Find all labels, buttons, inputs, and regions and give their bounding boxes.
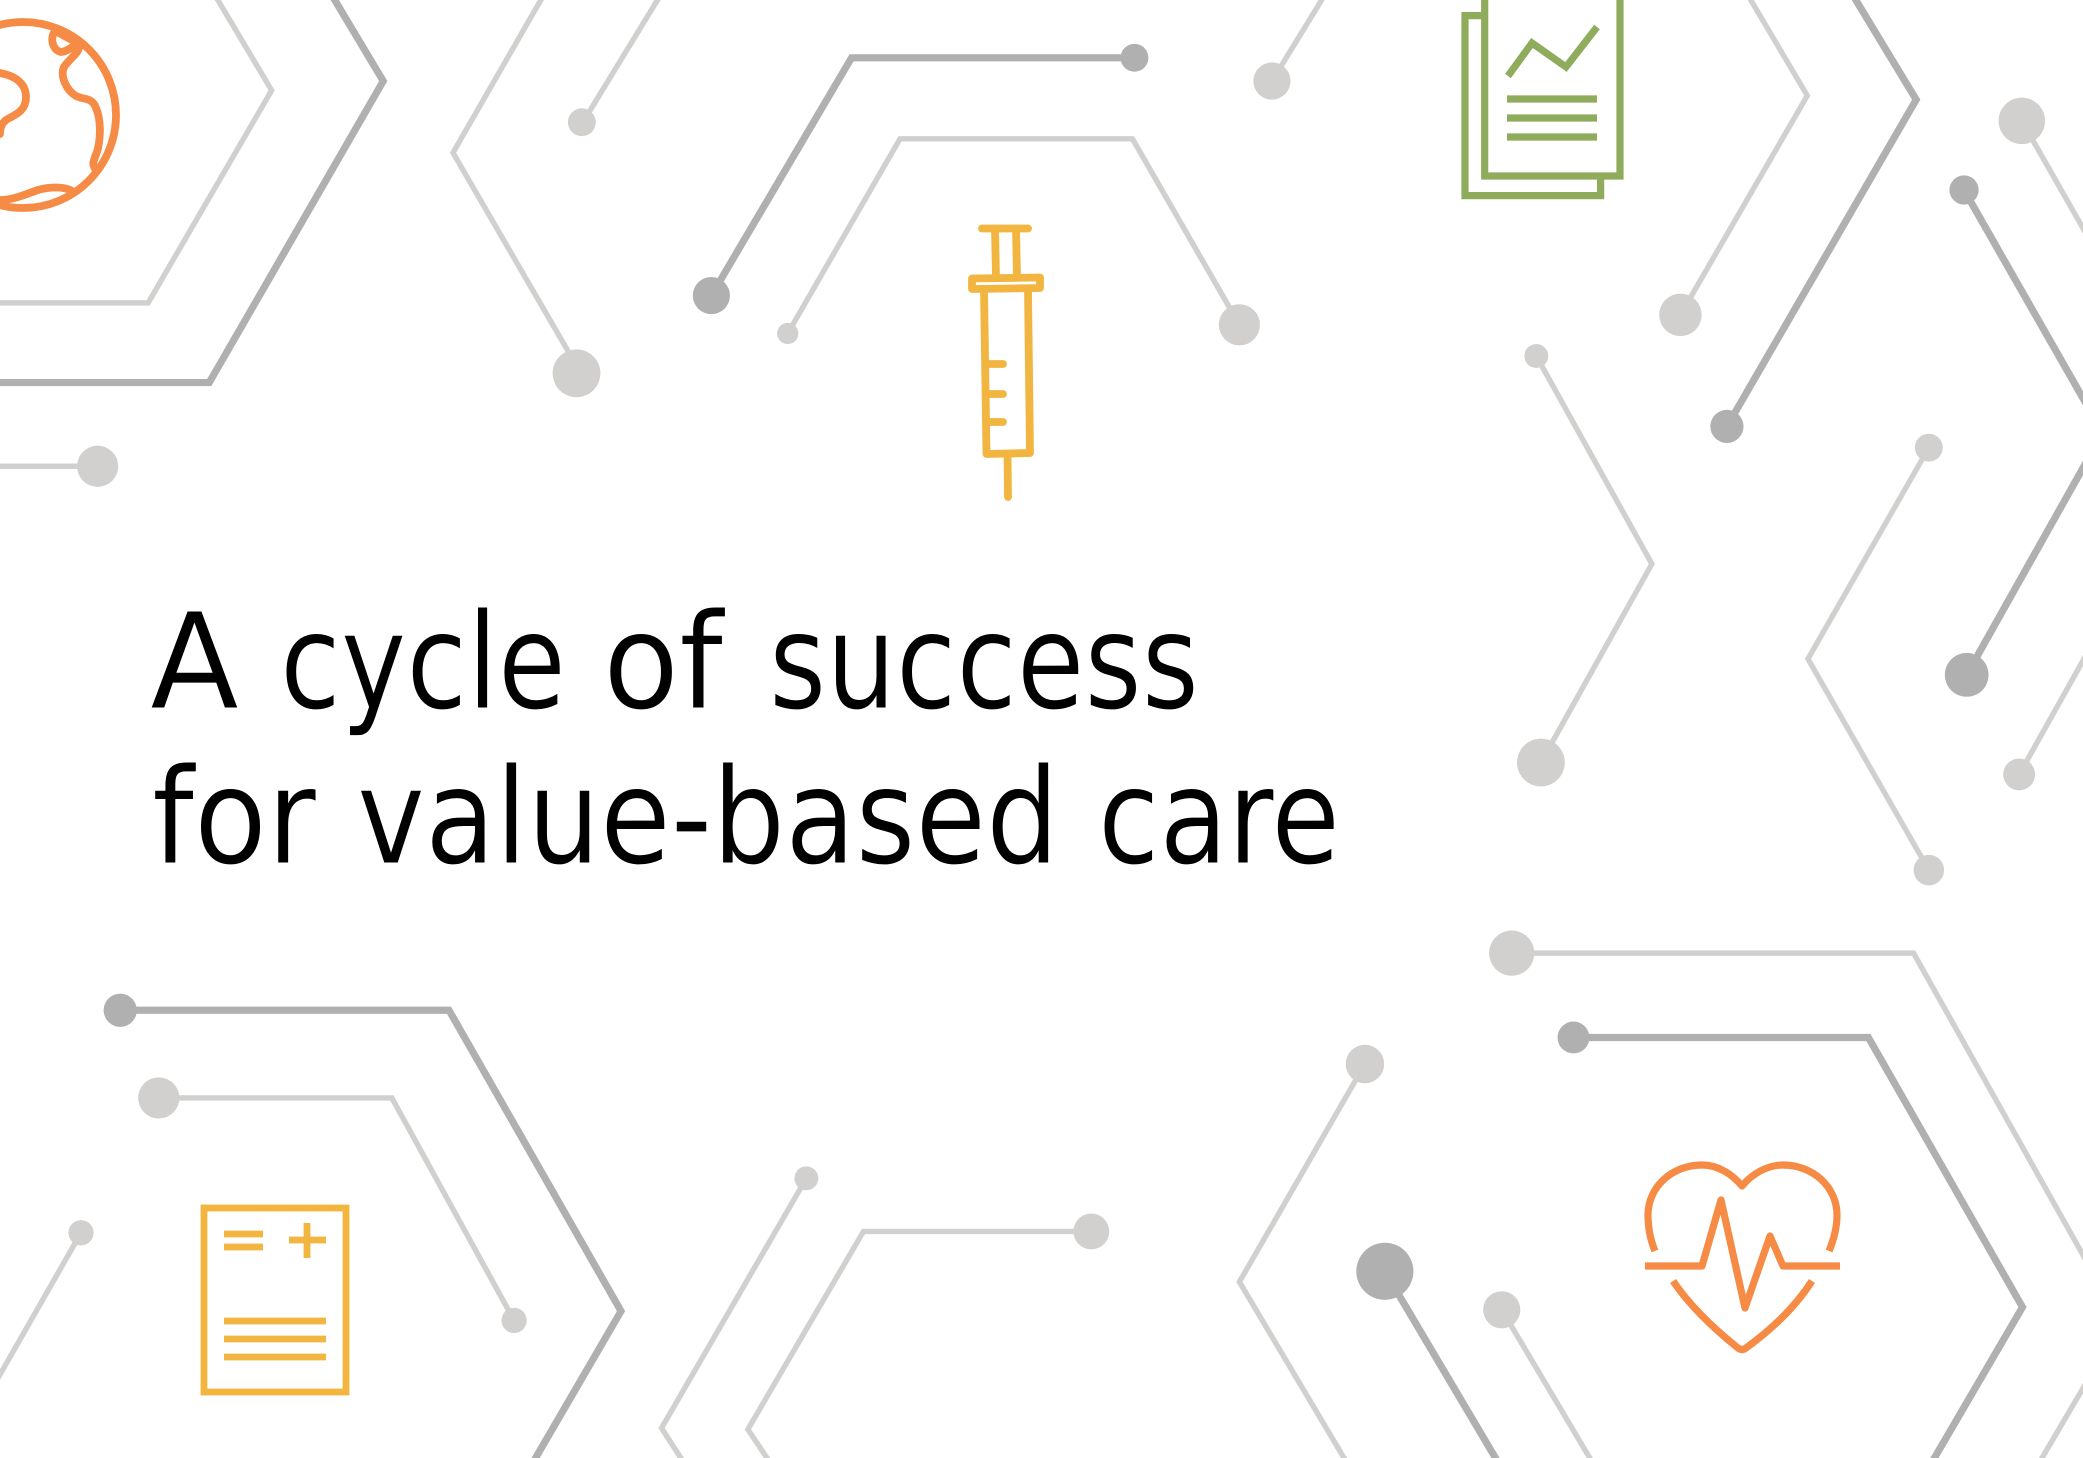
title: value-based xyxy=(357,741,1059,895)
icon: medical form xyxy=(204,1208,346,1392)
title: care xyxy=(1098,741,1340,895)
circuit traces: bottom left xyxy=(0,994,621,1458)
circuit traces: top centre xyxy=(693,0,1326,345)
icon: heart with pulse xyxy=(1645,1165,1840,1350)
title: A xyxy=(150,586,239,740)
title: of xyxy=(603,586,726,740)
circuit traces: bottom centre xyxy=(662,1166,1109,1458)
circuit traces: bottom right xyxy=(1239,931,2083,1458)
circuit traces: top left xyxy=(0,0,662,487)
title: for xyxy=(152,741,316,895)
title xyxy=(150,586,1340,895)
title: cycle xyxy=(280,586,566,740)
title: success xyxy=(769,586,1199,740)
circuit traces: middle right xyxy=(1517,344,2083,885)
circuit traces: top right xyxy=(1659,0,2083,443)
icon: report document with chart xyxy=(1465,0,1620,196)
icon: globe xyxy=(0,22,116,208)
icon: syringe xyxy=(972,228,1040,497)
